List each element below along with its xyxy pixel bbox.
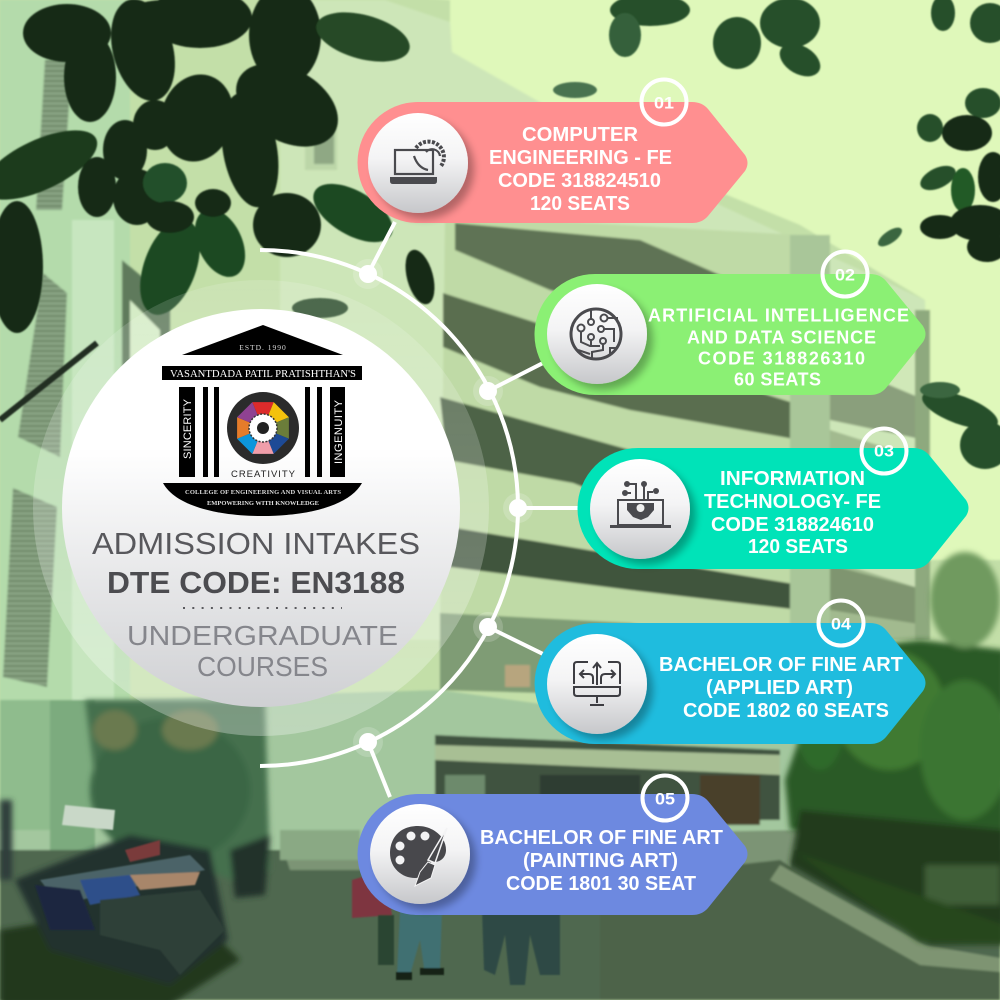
subheading: undergraduate courses <box>127 620 398 682</box>
college logo: EMPOWERING WITH KNOWLEDGE <box>207 500 319 507</box>
panel 04: applied art <box>535 600 926 744</box>
text: information technology details: INFORMATION <box>720 468 865 490</box>
college logo: CREATIVITY <box>231 469 296 480</box>
heading: admission intakes: ADMISSION INTAKES <box>92 526 420 561</box>
college logo <box>162 325 362 516</box>
number badge 02: 02 <box>835 266 855 284</box>
panel 05: painting art <box>357 776 748 915</box>
panel 02: AI and data science <box>534 252 926 395</box>
text: computer engineering details: CODE 318824510 <box>498 170 661 192</box>
number badge 01 <box>642 80 686 124</box>
text: information technology details <box>704 468 881 558</box>
text: AI and data science details: AND DATA SCIENCE <box>687 328 876 348</box>
icon: laptop with circuit gear <box>590 459 690 559</box>
text: AI and data science details: 60 SEATS <box>734 370 821 390</box>
translucent halo circle <box>33 280 489 736</box>
text: information technology details: TECHNOLOGY- FE <box>704 491 881 513</box>
number badge 05: 05 <box>655 790 675 808</box>
balconies / window bands <box>440 215 800 640</box>
text: information technology details: 120 SEATS <box>748 536 848 558</box>
text: painting art details: BACHELOR OF FINE ART <box>480 827 723 849</box>
text: painting art details <box>480 827 723 895</box>
icon: palette and brush <box>370 804 470 904</box>
number badge 03 <box>862 428 906 474</box>
panel 01: computer engineering <box>358 80 748 223</box>
text: applied art details: CODE 1802 60 SEATS <box>683 700 889 722</box>
text: painting art details: (PAINTING ART) <box>523 850 678 872</box>
college logo: INGENUITY <box>333 399 345 464</box>
central white circle <box>62 309 460 707</box>
icon: laptop with gear <box>368 113 468 213</box>
college logo: VASANTDADA PATIL PRATISHTHAN'S <box>170 368 356 380</box>
text: information technology details: CODE 318824610 <box>711 514 874 536</box>
text: applied art details: BACHELOR OF FINE ART <box>659 654 903 676</box>
connector arc <box>260 222 578 797</box>
dotted divider <box>183 607 342 609</box>
text: computer engineering details: COMPUTER <box>522 124 639 146</box>
icon: monitor with arrows <box>547 634 647 734</box>
subheading: undergraduate courses: COURSES <box>197 651 328 682</box>
number badge 04: 04 <box>831 614 852 634</box>
text: AI and data science details <box>648 306 909 390</box>
college logo: SINCERITY <box>182 398 194 459</box>
arc nodes <box>353 259 533 757</box>
text: painting art details: CODE 1801 30 SEAT <box>506 873 696 895</box>
college logo: COLLEGE OF ENGINEERING AND VISUAL ARTS <box>185 489 341 496</box>
college logo: ESTD. 1990 <box>239 343 287 352</box>
number badge 03: 03 <box>874 442 894 460</box>
panel 03: information technology <box>577 428 968 569</box>
heading: DTE code: DTE CODE: EN3188 <box>107 565 405 600</box>
subheading: undergraduate courses: UNDERGRADUATE <box>127 620 398 651</box>
number badge 05 <box>642 776 688 820</box>
icon: circuit globe <box>547 284 647 384</box>
number badge 01: 01 <box>654 94 674 112</box>
text: computer engineering details <box>489 124 672 215</box>
text: applied art details <box>659 654 903 722</box>
text: computer engineering details: ENGINEERING - FE <box>489 147 672 169</box>
text: computer engineering details: 120 SEATS <box>530 193 630 215</box>
text: AI and data science details: CODE 318826310 <box>698 348 865 368</box>
number badge 02 <box>822 252 868 296</box>
text: AI and data science details: ARTIFICIAL INTELLIGENCE <box>648 306 909 326</box>
number badge 04 <box>818 600 864 646</box>
text: applied art details: (APPLIED ART) <box>706 677 853 699</box>
